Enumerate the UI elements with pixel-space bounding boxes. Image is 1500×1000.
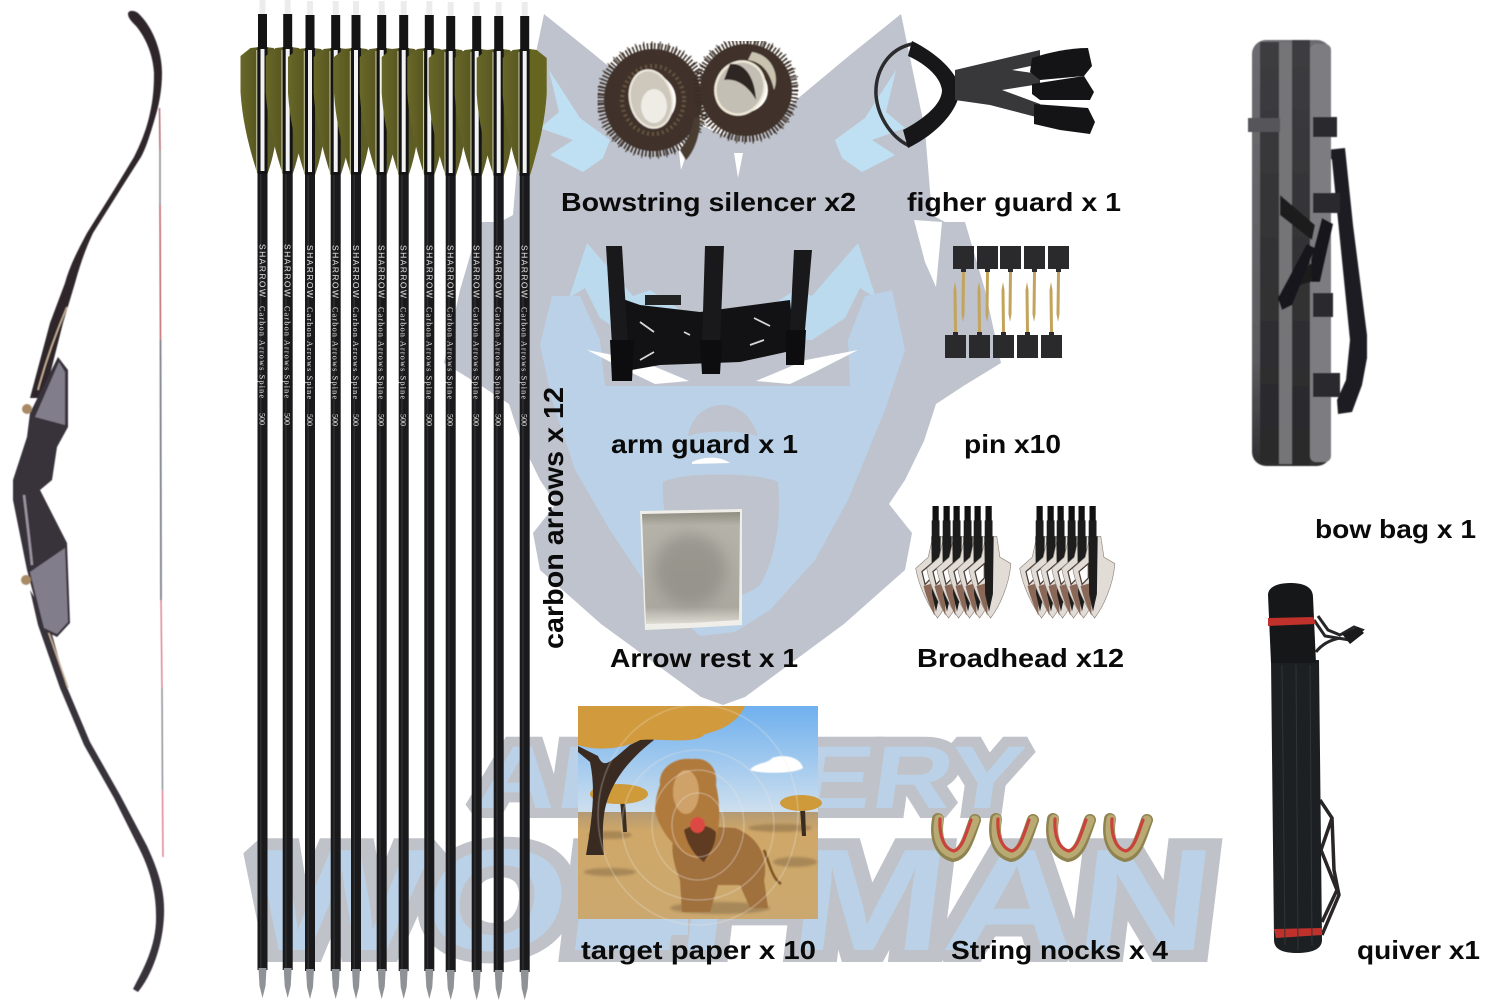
center lid — [1279, 42, 1292, 464]
watermark: wolf head logo — [444, 14, 1001, 705]
arrow 6: Carbon Arrows Spine — [377, 307, 386, 399]
wrist loop — [876, 44, 912, 146]
icon: arrow rest fur — [640, 509, 742, 630]
carbon arrows — [240, 0, 547, 1000]
arrow 10: 500 — [472, 414, 481, 426]
arrow 5: Carbon Arrows Spine — [351, 307, 360, 399]
fur ring left — [607, 53, 699, 147]
bullseye — [690, 817, 705, 833]
top strap — [1314, 616, 1362, 652]
tube — [1271, 660, 1322, 953]
label: string nocks: String nocks x 4 — [951, 935, 1169, 965]
handle straps — [1280, 195, 1318, 290]
arrow 11: Carbon Arrows Spine — [494, 307, 503, 399]
straps — [955, 50, 1040, 118]
fur tails — [680, 118, 700, 160]
label: arm guard: arm guard x 1 — [611, 429, 798, 459]
arrow 9 — [429, 2, 469, 1000]
bottom band — [1274, 928, 1322, 938]
broadhead group left — [916, 506, 1011, 618]
arrow 2: SHARROW — [283, 244, 293, 297]
lion body — [672, 825, 768, 912]
finger tip 1 — [1030, 48, 1092, 80]
arrow 9: Carbon Arrows Spine — [446, 307, 455, 399]
arrow 1 — [240, 0, 280, 998]
lion — [598, 705, 798, 925]
target paper with lion — [578, 705, 822, 925]
shoulder strap — [1326, 148, 1367, 414]
dark band left — [1260, 42, 1279, 464]
arrow 11 — [477, 2, 517, 1000]
arrow 1: Carbon Arrows Spine — [258, 306, 266, 398]
label: bowstring silencer: Bowstring silencer x2 — [561, 187, 856, 217]
wolf muzzle blue — [540, 290, 905, 636]
arrow 1: SHARROW — [258, 244, 268, 297]
fangs — [678, 143, 743, 178]
tube ribs — [1282, 665, 1312, 950]
arrow 6: SHARROW — [377, 245, 387, 298]
upper limb — [30, 11, 162, 398]
icon: bowstring silencers — [607, 47, 789, 160]
arrow 8: Carbon Arrows Spine — [424, 307, 433, 399]
finger tip 2 — [1032, 76, 1094, 100]
straps — [606, 246, 812, 345]
light right side — [1310, 44, 1331, 462]
brackets — [1313, 117, 1340, 397]
white notch — [914, 220, 942, 287]
arrow 12 with right feather — [503, 2, 547, 1000]
far tree right — [780, 795, 822, 836]
arrow 4: SHARROW — [331, 245, 341, 298]
riser — [13, 357, 70, 637]
riser light panels — [30, 362, 68, 634]
arrow 11: SHARROW — [494, 245, 504, 298]
big acacia tree — [578, 706, 745, 855]
icon: quiver — [1268, 583, 1364, 953]
label: pin: pin x10 — [964, 429, 1061, 459]
label: finger guard: figher guard x 1 — [907, 187, 1121, 217]
sky — [578, 706, 818, 814]
lion face — [673, 770, 699, 814]
arrow 12 with right feather: SHARROW — [520, 245, 530, 298]
arrow 9: 500 — [446, 414, 455, 426]
arrow 10: SHARROW — [472, 245, 482, 298]
broadhead group right — [1020, 506, 1115, 618]
riser accent — [24, 495, 32, 565]
lower strap — [1320, 800, 1339, 935]
arrow 3: 500 — [305, 414, 314, 426]
watermark: ARCHERY: ARCHERY — [471, 727, 1030, 827]
icon: string nocks — [937, 819, 1147, 856]
arrow 2: 500 — [283, 413, 292, 425]
bottom pins — [945, 282, 1062, 358]
cap — [1268, 583, 1316, 663]
arrow 10 — [455, 2, 495, 1000]
arrow 4: Carbon Arrows Spine — [331, 307, 340, 399]
arrow 8: 500 — [424, 414, 433, 426]
arrow 7: SHARROW — [399, 245, 409, 298]
label: quiver: quiver x1 — [1357, 935, 1480, 965]
icon: broadheads — [916, 506, 1115, 618]
top band — [1268, 617, 1316, 626]
side grip — [1248, 118, 1280, 132]
case body — [1252, 40, 1331, 466]
buckles — [610, 330, 806, 381]
handle 1 — [1278, 244, 1315, 310]
finger tip 3 — [1034, 104, 1095, 134]
arrow 4 — [314, 1, 354, 999]
arrow 7 — [382, 1, 422, 999]
body — [620, 298, 795, 372]
fur ring right — [703, 47, 789, 133]
icon: finger guard — [876, 41, 1095, 148]
arrow 9: SHARROW — [446, 245, 456, 298]
pad — [903, 41, 960, 148]
ground — [578, 812, 818, 919]
brand tag — [645, 295, 681, 305]
eye slits — [587, 350, 858, 464]
bow string — [160, 108, 163, 857]
lion chest — [684, 825, 716, 862]
ground patches — [584, 824, 817, 914]
arrow 11: 500 — [494, 414, 503, 426]
arrow 7: 500 — [399, 414, 408, 426]
label: target paper: target paper x 10 — [581, 935, 816, 965]
brow fur right — [756, 70, 905, 340]
arrow 12 with right feather: 500 — [520, 414, 529, 426]
arrow 1: 500 — [258, 413, 266, 425]
knobs — [22, 404, 32, 414]
arrow 10: Carbon Arrows Spine — [472, 307, 481, 399]
clip — [1342, 627, 1364, 644]
arrow 5 — [334, 1, 374, 999]
label: carbon arrows: carbon arrows x 12 — [538, 387, 569, 649]
arrow 12 with right feather: Carbon Arrows Spine — [520, 307, 529, 399]
wolf nose dome — [688, 405, 758, 436]
brow fur left — [540, 70, 689, 340]
label: arrow rest: Arrow rest x 1 — [610, 643, 798, 673]
arrow 6: 500 — [377, 414, 386, 426]
knob lower — [21, 575, 31, 585]
label: broadhead: Broadhead x12 — [917, 643, 1124, 673]
watermark lower fill — [598, 915, 688, 935]
recurve bow — [13, 11, 164, 992]
arrow 5: 500 — [351, 414, 360, 426]
lion tail — [764, 850, 781, 884]
arrow 3: Carbon Arrows Spine — [305, 307, 314, 399]
target rings — [598, 705, 798, 925]
arrow 2 — [266, 0, 306, 998]
arrow 8: SHARROW — [424, 245, 434, 298]
wolf silhouette — [444, 14, 1001, 705]
stitch slits — [640, 318, 770, 360]
zipper band — [1292, 40, 1310, 466]
lower limb — [30, 590, 164, 992]
icon: bow bag — [1248, 40, 1367, 466]
arrow 3 — [288, 1, 328, 999]
far tree left — [590, 784, 648, 832]
watermark: WOLFMAN: WOLFMAN — [242, 818, 1222, 981]
arrow 2: Carbon Arrows Spine — [283, 306, 292, 398]
label: bow bag: bow bag x 1 — [1315, 514, 1476, 544]
arrow 3: SHARROW — [305, 245, 315, 298]
icon: pins — [945, 246, 1069, 358]
icon: arm guard — [606, 246, 812, 381]
wolf jaw — [663, 474, 779, 597]
arrow 8 — [407, 1, 447, 999]
arrow 5: SHARROW — [351, 245, 361, 298]
arrow 6 — [360, 1, 400, 999]
arrow 7: Carbon Arrows Spine — [399, 307, 408, 399]
arrow 4: 500 — [331, 414, 340, 426]
handle 2 — [1311, 218, 1333, 282]
limb highlights — [38, 307, 68, 688]
lion mane — [655, 759, 719, 860]
top pins — [953, 246, 1069, 322]
clouds — [750, 756, 803, 773]
